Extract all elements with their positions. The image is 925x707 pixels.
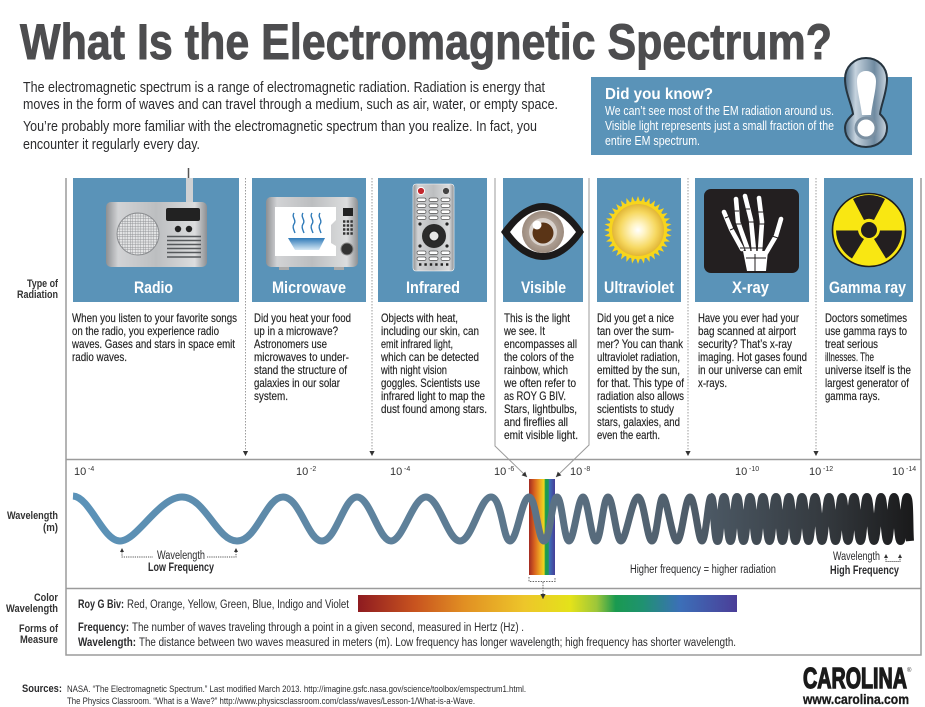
wavelength scale ticks: 10 bbox=[892, 466, 904, 478]
text: x-ray description: security? That’s x-ray bbox=[698, 337, 792, 351]
text: visible description: encompasses all bbox=[504, 337, 577, 351]
text: microwave description bbox=[254, 311, 351, 403]
text: infrared description: with night vision bbox=[380, 363, 447, 377]
wavelength scale ticks: 10 bbox=[390, 466, 402, 478]
wavelength scale ticks: 10 bbox=[570, 466, 582, 478]
icon: eye bbox=[501, 203, 584, 260]
intro text: encounter it regularly every day. bbox=[23, 137, 200, 153]
text: gamma ray description: use gamma rays to bbox=[825, 324, 907, 338]
text: ultraviolet description: for that. This type of bbox=[597, 376, 685, 390]
text: x-ray description bbox=[698, 311, 807, 390]
text: ultraviolet description: stars, galaxies, and bbox=[597, 415, 680, 429]
text: microwave description: up in a microwave? bbox=[254, 324, 338, 338]
side label: color wavelength: Color bbox=[34, 592, 59, 604]
text: ultraviolet description: tan over the sum- bbox=[597, 324, 674, 338]
annotation: high frequency wavelength: Wavelength bbox=[833, 551, 880, 563]
text: gamma ray description: Doctors sometimes bbox=[825, 311, 907, 325]
text: microwave description: stand the structure of bbox=[254, 363, 348, 377]
bracket and arrow from visible band to spectrum bar bbox=[529, 577, 555, 599]
text: ultraviolet description bbox=[597, 311, 685, 442]
icon: exclamation mark bbox=[845, 58, 887, 147]
definitions: frequency and wavelength: The number of waves traveling through a point in a given second, measured in Hertz (Hz) . bbox=[132, 622, 524, 634]
text: x-ray description: x-rays. bbox=[698, 376, 727, 390]
icon: remote control bbox=[413, 184, 454, 271]
did you know text: entire EM spectrum. bbox=[605, 134, 700, 148]
definitions: frequency and wavelength: Frequency: bbox=[78, 622, 129, 634]
text: ultraviolet description: Did you get a nice bbox=[597, 311, 674, 325]
text: radio description: When you listen to your favorite songs bbox=[72, 311, 237, 325]
annotation: high frequency wavelength bbox=[830, 551, 902, 577]
side label: wavelength: Wavelength bbox=[7, 510, 58, 522]
text: ultraviolet description: emitted by the sun, bbox=[597, 363, 680, 377]
wavelength scale ticks: -6 bbox=[508, 466, 514, 473]
chart frame bbox=[66, 178, 921, 655]
wavelength scale ticks: -10 bbox=[749, 466, 759, 473]
roy g biv text: Roy G Biv: bbox=[78, 599, 124, 611]
label: radio: Radio bbox=[134, 278, 173, 297]
wavelength scale ticks: -2 bbox=[310, 466, 316, 473]
text: infrared description: Objects with heat, bbox=[381, 311, 458, 325]
side label: wavelength bbox=[7, 510, 58, 534]
text: microwave description: galaxies in our solar bbox=[254, 376, 340, 390]
text: infrared description: including our skin, can bbox=[381, 324, 479, 338]
wavelength scale ticks: -14 bbox=[906, 466, 916, 473]
color spectrum bar bbox=[358, 595, 737, 612]
definitions: frequency and wavelength: Wavelength: bbox=[78, 637, 136, 649]
sources: Sources: bbox=[22, 683, 62, 695]
sources: The Physics Classroom. “What is a Wave?” http://www.physicsclassroom.com/class/waves/Lesson-1/What-is-a-Wave. bbox=[67, 696, 475, 707]
side label: type of radiation bbox=[17, 278, 58, 301]
panel: gamma ray bbox=[824, 178, 913, 302]
text: ultraviolet description: radiation also allows bbox=[597, 389, 684, 403]
text: gamma ray description: illnesses. The bbox=[825, 350, 874, 364]
text: visible description: rainbow, which bbox=[504, 363, 568, 377]
text: visible description: we often refer to bbox=[503, 376, 576, 390]
text: infrared description: goggles. Scientists use bbox=[381, 376, 480, 390]
text: visible description: Stars, lightbulbs, bbox=[504, 402, 577, 416]
text: microwave description: system. bbox=[254, 389, 288, 403]
wavelength scale ticks: 10 bbox=[74, 466, 86, 478]
sources bbox=[22, 683, 526, 707]
text: visible description: as ROY G BIV. bbox=[504, 389, 566, 403]
text: x-ray description: bag scanned at airport bbox=[698, 324, 797, 338]
text: ultraviolet description: ultraviolet radiation, bbox=[597, 350, 680, 364]
text: radio description: radio waves. bbox=[72, 350, 127, 364]
wavelength scale ticks: -4 bbox=[88, 466, 94, 473]
side label: color wavelength bbox=[6, 592, 59, 615]
intro text bbox=[23, 80, 558, 153]
text: infrared description: which can be detected bbox=[380, 350, 479, 364]
text: gamma ray description: gamma rays. bbox=[825, 389, 880, 403]
icon: radio bbox=[106, 168, 207, 267]
text: ultraviolet description: mer? You can thank bbox=[597, 337, 684, 351]
icon: radiation symbol bbox=[832, 194, 906, 266]
visible light callout lines bbox=[495, 178, 589, 477]
text: visible description: emit visible light. bbox=[504, 428, 578, 442]
annotation: low frequency wavelength: Low Frequency bbox=[148, 562, 214, 574]
text: visible description bbox=[503, 311, 578, 442]
panel: infrared bbox=[378, 178, 487, 302]
text: radio description: on the radio, you experience radio bbox=[72, 324, 219, 338]
text: x-ray description: in our universe can emit bbox=[698, 363, 803, 377]
panel: x-ray bbox=[695, 178, 809, 302]
text: gamma ray description bbox=[825, 311, 911, 403]
annotation: high frequency wavelength: High Frequency bbox=[830, 565, 899, 577]
side label: wavelength: (m) bbox=[43, 522, 58, 534]
annotation: low frequency wavelength: Wavelength bbox=[157, 550, 205, 562]
logo: carolina bbox=[802, 663, 912, 707]
intro text: moves in the form of waves and can travel through a medium, such as air, water, or empty space. bbox=[23, 97, 558, 113]
text: microwave description: microwaves to under- bbox=[254, 350, 349, 364]
text: microwave description: Did you heat your food bbox=[254, 311, 351, 325]
panel: microwave bbox=[252, 178, 366, 302]
text: radio description bbox=[71, 311, 237, 364]
side label: forms of measure bbox=[19, 623, 58, 646]
did you know text: Visible light represents just a small fraction of the bbox=[605, 119, 834, 133]
intro text: You’re probably more familiar with the electromagnetic spectrum than you realize. In fact, you bbox=[23, 119, 537, 135]
wavelength scale ticks: -4 bbox=[404, 466, 410, 473]
text: visible description: we see. It bbox=[503, 324, 546, 338]
text: microwave description: Astronomers use bbox=[254, 337, 327, 351]
wavelength scale ticks: 10 bbox=[735, 466, 747, 478]
wavelength scale ticks: 10 bbox=[809, 466, 821, 478]
label: microwave: Microwave bbox=[272, 278, 346, 297]
icon: sun bbox=[602, 194, 674, 266]
side label: forms of measure: Forms of bbox=[19, 623, 58, 635]
text: ultraviolet description: scientists to study bbox=[597, 402, 674, 416]
wavelength scale ticks: -12 bbox=[823, 466, 833, 473]
wave: low to high frequency bbox=[73, 496, 910, 541]
dashed column dividers bbox=[246, 178, 816, 456]
roy g biv text: Red, Orange, Yellow, Green, Blue, Indigo and Violet bbox=[127, 599, 350, 611]
definitions: frequency and wavelength: The distance between two waves measured in meters (m). Low frequency has longer wavelength; high frequency has shorter wavelength. bbox=[139, 637, 736, 649]
wavelength scale ticks: 10 bbox=[296, 466, 308, 478]
logo: carolina: www.carolina.com bbox=[802, 692, 909, 707]
text: visible description: the colors of the bbox=[504, 350, 574, 364]
side label: type of radiation: Type of bbox=[27, 278, 58, 290]
icon: microwave bbox=[266, 197, 358, 270]
panel: radio bbox=[73, 168, 239, 302]
text: gamma ray description: treat serious bbox=[825, 337, 878, 351]
label: ultraviolet: Ultraviolet bbox=[604, 278, 674, 297]
text: visible description: and fireflies all bbox=[504, 415, 568, 429]
panel: ultraviolet bbox=[597, 178, 681, 302]
definitions: frequency and wavelength bbox=[78, 622, 736, 649]
label: infrared: Infrared bbox=[406, 278, 460, 297]
text: infrared description: dust found among stars. bbox=[381, 402, 487, 416]
text: infrared description bbox=[380, 311, 487, 416]
text: x-ray description: Have you ever had your bbox=[698, 311, 799, 325]
visible light band bbox=[529, 479, 555, 575]
side label: forms of measure: Measure bbox=[20, 634, 58, 646]
wavelength scale ticks: 10 bbox=[494, 466, 506, 478]
did you know text bbox=[605, 104, 834, 148]
annotation: higher frequency note: Higher frequency = higher radiation bbox=[630, 564, 776, 576]
text: visible description: This is the light bbox=[504, 311, 571, 325]
text: x-ray description: imaging. Hot gases found bbox=[698, 350, 807, 364]
wavelength scale ticks: -8 bbox=[584, 466, 590, 473]
icon: x-ray hand bbox=[704, 189, 799, 273]
did you know text: We can’t see most of the EM radiation around us. bbox=[605, 104, 834, 118]
text: infrared description: emit infrared light, bbox=[381, 337, 453, 351]
text: ultraviolet description: even the earth. bbox=[597, 428, 660, 442]
text: radio description: waves. Gases and stars in space emit bbox=[71, 337, 236, 351]
label: visible: Visible bbox=[521, 278, 566, 297]
wavelength scale ticks bbox=[74, 466, 916, 478]
intro text: The electromagnetic spectrum is a range of electromagnetic radiation. Radiation is energy that bbox=[23, 80, 545, 96]
panel: did you know bbox=[591, 58, 912, 155]
side label: color wavelength: Wavelength bbox=[6, 603, 58, 615]
panel: visible bbox=[501, 178, 584, 302]
did you know heading: Did you know? bbox=[605, 86, 713, 103]
text: infrared description: infrared light to map the bbox=[381, 389, 485, 403]
annotation: low frequency wavelength bbox=[120, 548, 238, 574]
label: x-ray: X-ray bbox=[732, 278, 769, 297]
label: gamma ray: Gamma ray bbox=[829, 278, 906, 297]
side label: type of radiation: Radiation bbox=[17, 289, 58, 301]
logo: carolina: ® bbox=[907, 667, 912, 674]
sources: NASA. “The Electromagnetic Spectrum.” Last modified March 2013. http://imagine.gsfc.nasa.gov/science/toolbox/emspectrum1.html. bbox=[67, 684, 526, 695]
